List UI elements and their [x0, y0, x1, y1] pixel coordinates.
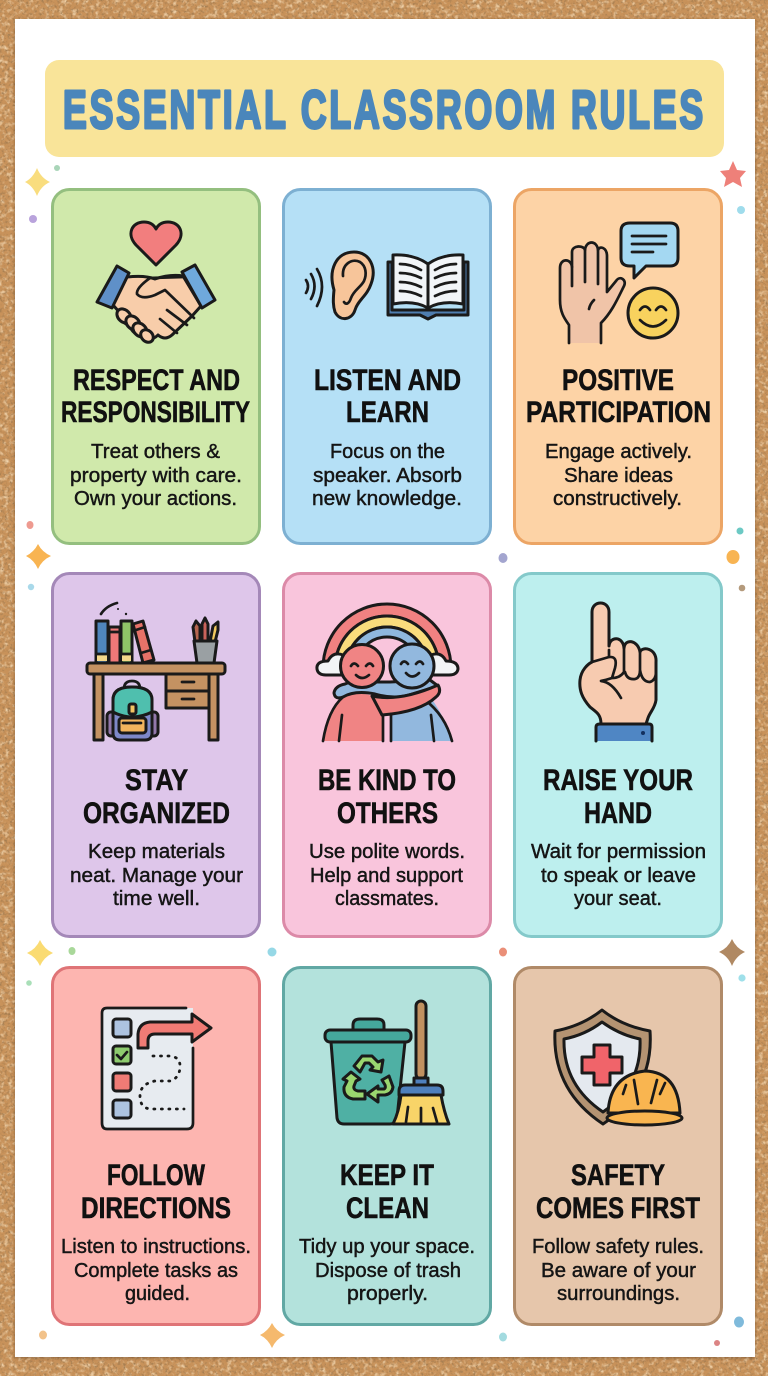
heading: ORGANIZED: [83, 797, 230, 830]
heading: [83, 764, 230, 830]
description: Keep materials: [88, 841, 225, 863]
description: time well.: [113, 888, 200, 910]
heading: LEARN: [346, 396, 429, 429]
description: Listen to instructions.: [61, 1236, 251, 1258]
description: Own your actions.: [74, 488, 237, 510]
description: [299, 1236, 475, 1305]
description: Treat others &: [91, 441, 221, 463]
description: [309, 841, 465, 910]
panel: respect and responsibility: [52, 190, 260, 544]
description: [531, 841, 706, 910]
heading: RESPECT AND: [73, 364, 240, 397]
heading: DIRECTIONS: [81, 1192, 231, 1225]
description: guided.: [125, 1283, 190, 1305]
heading: SAFETY: [571, 1159, 665, 1192]
description: Wait for permission: [531, 841, 706, 863]
heading: FOLLOW: [107, 1159, 206, 1192]
heading: LISTEN AND: [314, 364, 461, 397]
icon: checklist with arrow: [102, 1008, 211, 1129]
panel: positive participation: [514, 190, 722, 544]
description: [70, 841, 243, 910]
heading: RESPONSIBILITY: [61, 396, 250, 429]
description: classmates.: [335, 888, 439, 910]
panel: listen and learn: [284, 190, 490, 544]
heading: BE KIND TO: [318, 764, 456, 797]
heading: OTHERS: [337, 797, 438, 830]
heading: [536, 1159, 700, 1225]
icon: pointing hand with cuff: [580, 603, 656, 741]
heading: RAISE YOUR: [543, 764, 693, 797]
description: Share ideas: [564, 465, 673, 487]
description: Focus on the: [330, 441, 445, 463]
heading: STAY: [125, 764, 188, 797]
description: [545, 441, 692, 510]
description: Tidy up your space.: [299, 1236, 475, 1258]
panel: safety comes first: [514, 968, 722, 1324]
heading: [81, 1159, 231, 1225]
panel: follow directions: [52, 968, 260, 1324]
description: Dispose of trash: [315, 1260, 461, 1282]
heading: POSITIVE: [562, 364, 674, 397]
heading: PARTICIPATION: [526, 396, 711, 429]
heading: [543, 764, 693, 830]
panel: be kind to others: [284, 574, 490, 936]
description: surroundings.: [557, 1283, 680, 1305]
panel: keep it clean: [284, 968, 490, 1324]
icon: recycling bin and broom: [325, 1001, 449, 1124]
heading: CLEAN: [346, 1192, 429, 1225]
panel: stay organized: [52, 574, 260, 936]
description: [312, 441, 462, 510]
icon: raised hand, speech bubble and smile: [560, 223, 678, 343]
heading: HAND: [584, 797, 652, 830]
description: [61, 1236, 251, 1305]
icon: shield and hard hat: [555, 1010, 682, 1125]
panel: raise your hand: [514, 574, 722, 936]
description: Complete tasks as: [74, 1260, 238, 1282]
description: Follow safety rules.: [532, 1236, 704, 1258]
title: ESSENTIAL CLASSROOM RULES: [63, 80, 703, 140]
description: constructively.: [553, 488, 682, 510]
heading: [340, 1159, 434, 1225]
description: speaker. Absorb: [313, 465, 462, 487]
description: property with care.: [70, 465, 242, 487]
description: neat. Manage your: [70, 865, 243, 887]
icon: recycling arrows: [343, 1056, 393, 1102]
heading: [318, 764, 456, 830]
description: new knowledge.: [312, 488, 462, 510]
description: Help and support: [310, 865, 463, 887]
title banner: [45, 60, 724, 157]
description: your seat.: [574, 888, 662, 910]
description: [70, 441, 242, 510]
heading: [61, 364, 250, 429]
description: properly.: [347, 1283, 428, 1305]
heading: [526, 364, 711, 429]
heading: [314, 364, 461, 429]
icon: desk, books and backpack: [87, 603, 225, 740]
description: [532, 1236, 704, 1305]
description: Engage actively.: [545, 441, 692, 463]
heading: KEEP IT: [340, 1159, 434, 1192]
icon: ear and book: [306, 252, 468, 319]
heading: COMES FIRST: [536, 1192, 700, 1225]
icon: two friends under rainbow: [317, 604, 458, 741]
icon: heart and handshake: [97, 222, 215, 345]
description: Use polite words.: [309, 841, 465, 863]
description: to speak or leave: [541, 865, 696, 887]
description: Be aware of your: [541, 1260, 696, 1282]
